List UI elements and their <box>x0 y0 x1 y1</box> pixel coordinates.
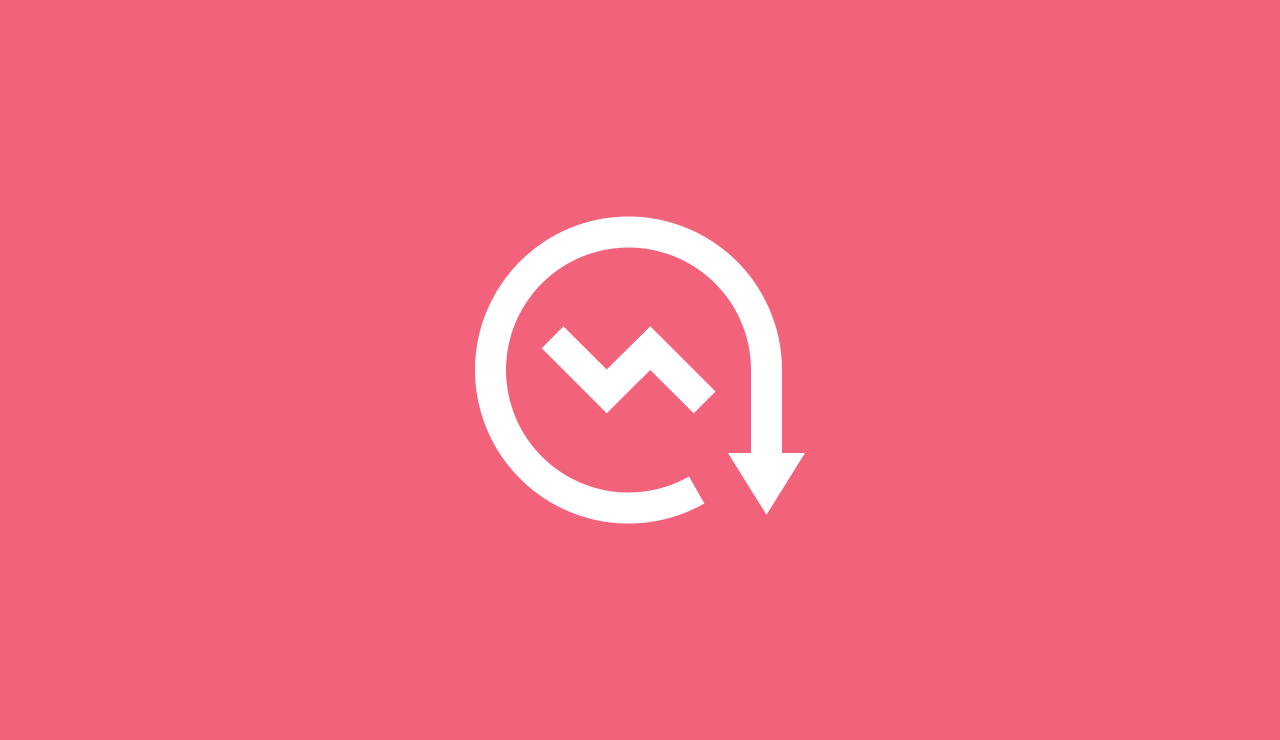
circular arrow stroke <box>491 232 766 508</box>
arrow head <box>728 453 805 515</box>
icon: circular arrow with downward zigzag line <box>491 232 805 515</box>
zigzag trend line <box>542 326 716 413</box>
